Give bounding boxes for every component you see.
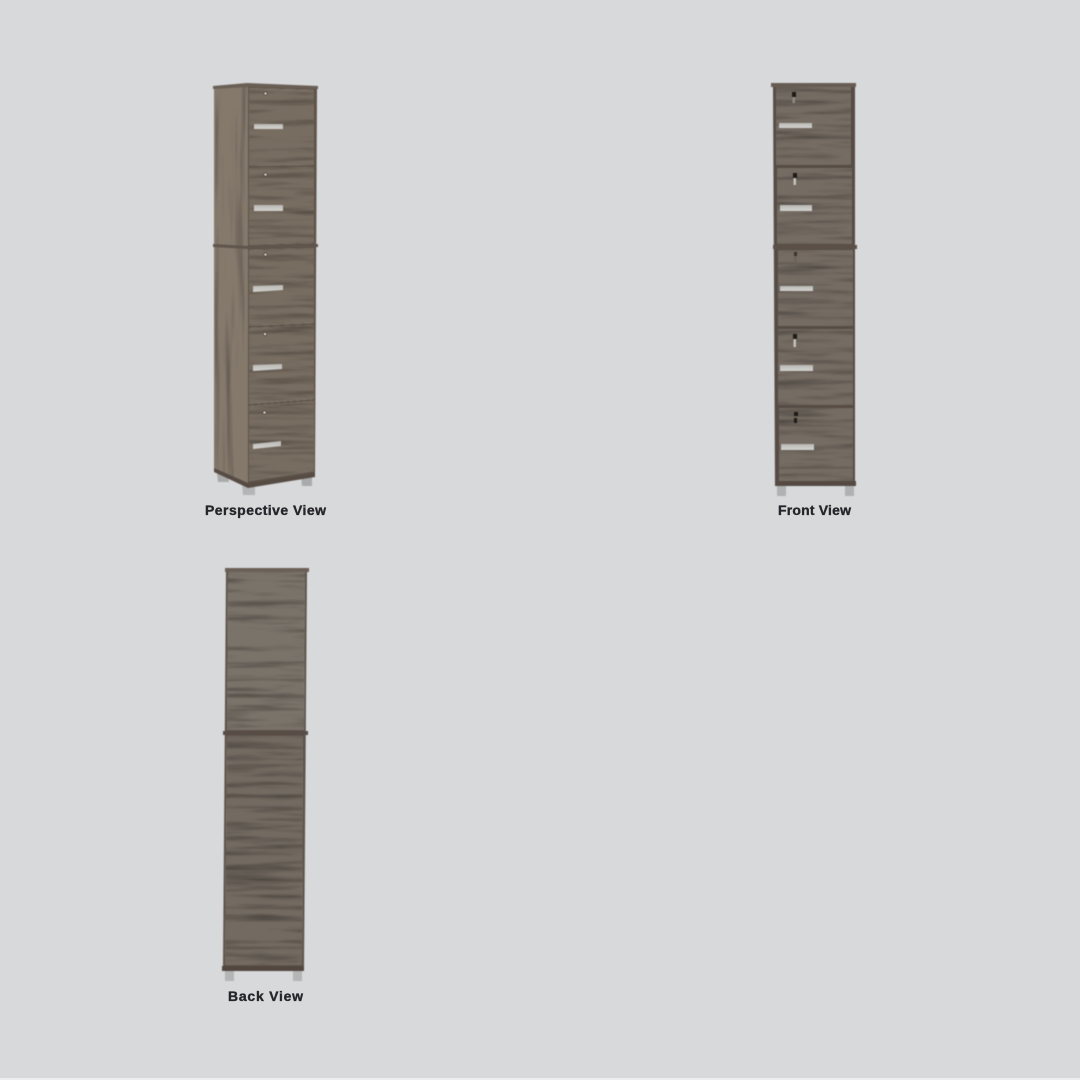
door 1 [249, 88, 314, 166]
middle band [223, 731, 308, 735]
middle band [773, 245, 857, 249]
panel: back view cabinet [222, 568, 309, 981]
top edge [771, 83, 856, 87]
panel: perspective view cabinet [213, 83, 318, 495]
legs [777, 486, 854, 496]
front panel [248, 86, 317, 486]
bottom edge [775, 481, 856, 486]
locks [263, 92, 267, 414]
label: front view: Front View [778, 502, 851, 518]
panel: front view cabinet [771, 83, 857, 496]
bottom edge [214, 468, 315, 488]
door 3 [778, 250, 853, 326]
keys [792, 92, 798, 423]
bottom edge [222, 966, 304, 971]
door 2 [777, 168, 852, 244]
frame [223, 570, 307, 968]
label: perspective view: Perspective View [205, 502, 326, 518]
door 5 [249, 401, 314, 481]
legs [225, 971, 302, 981]
bottom strip [0, 1078, 1080, 1080]
label: back view: Back View [228, 988, 303, 1004]
handles [779, 123, 814, 450]
lower back panel [225, 736, 303, 965]
door 4 [249, 325, 314, 404]
frame [773, 86, 855, 484]
door 4 [778, 329, 853, 405]
door 3 [249, 248, 314, 326]
side panel [214, 86, 249, 486]
top edge [213, 83, 318, 89]
handles [253, 124, 283, 449]
upper back panel [227, 572, 305, 730]
middle band [213, 244, 318, 249]
door 5 [779, 408, 853, 481]
door 1 [776, 87, 851, 165]
legs [217, 473, 312, 495]
top edge [225, 568, 309, 572]
door 2 [249, 167, 314, 245]
